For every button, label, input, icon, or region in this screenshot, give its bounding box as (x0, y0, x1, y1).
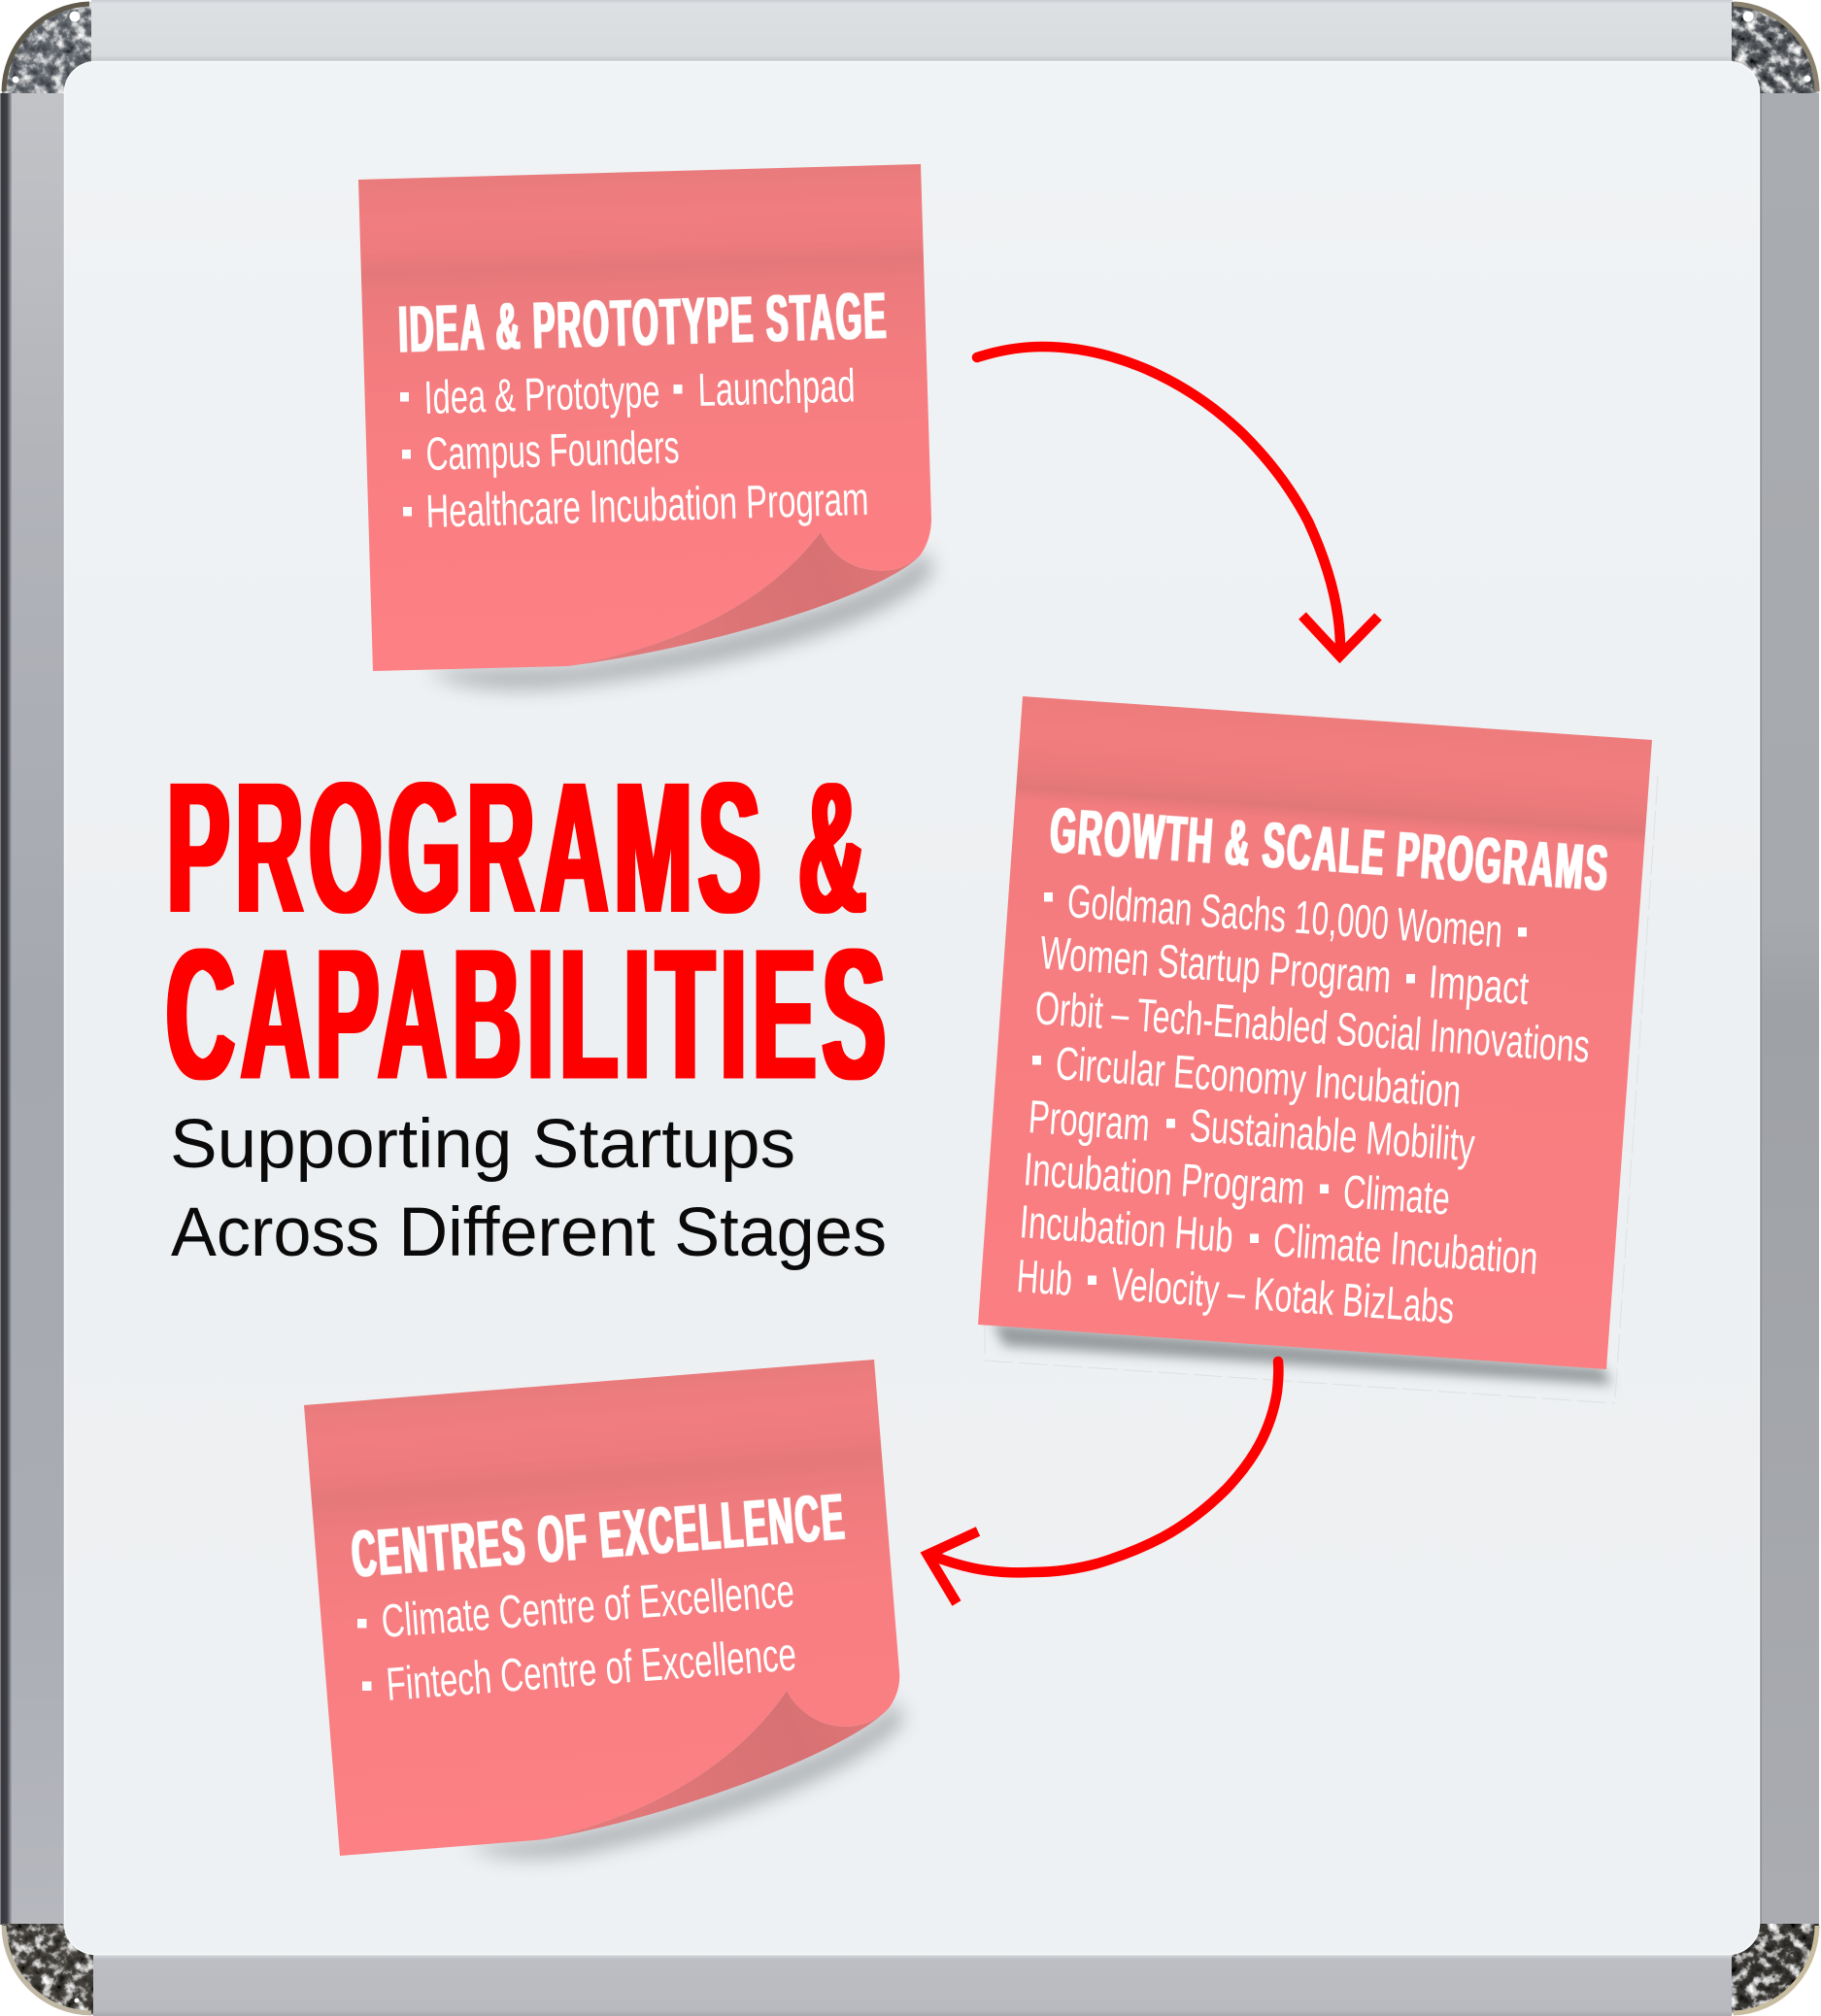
note list: Idea & Prototype (423, 366, 660, 424)
note sheet (358, 164, 931, 671)
frame bar: top (91, 0, 1733, 61)
subtitle: Supporting Startups (170, 1106, 795, 1183)
frame bar: right inner edge (1759, 93, 1762, 1925)
note list: Climate Incubation (1271, 1215, 1539, 1285)
note curled corner (568, 532, 921, 666)
note list: Climate Centre of Excellence (380, 1565, 796, 1648)
arrow: growth to centres (927, 1361, 1278, 1603)
frame bar: bottom (93, 1955, 1732, 2016)
note heading: CENTRES OF EXCELLENCE (349, 1480, 849, 1592)
note list: Climate (1341, 1166, 1452, 1226)
frame corner: bottom right (1732, 1924, 1819, 2015)
title: PROGRAMS & (167, 743, 872, 952)
note list: Velocity – Kotak BizLabs (1109, 1259, 1456, 1334)
title (166, 743, 892, 1119)
note list: Fintech Centre of Excellence (385, 1629, 798, 1711)
note list: Goldman Sachs 10,000 Women (1065, 876, 1504, 958)
title: CAPABILITIES (166, 909, 892, 1119)
arrow: idea to growth (977, 347, 1378, 656)
frame bar: left (0, 93, 65, 1925)
frame corner: top left (2, 2, 91, 93)
note list: Impact (1427, 957, 1531, 1015)
note list: Launchpad (697, 360, 856, 417)
note shadow (427, 550, 932, 689)
frame corner: top right (1732, 2, 1819, 93)
panel: idea and prototype stage note (358, 164, 932, 689)
note outline guide (985, 776, 1658, 1403)
panel: growth and scale programs note (978, 696, 1658, 1403)
note list: Sustainable Mobility (1188, 1100, 1476, 1171)
note heading: IDEA & PROTOTYPE STAGE (397, 279, 889, 366)
note list (400, 360, 869, 538)
note list: Hub (1015, 1251, 1074, 1306)
subtitle: Across Different Stages (171, 1194, 887, 1271)
note sheet (978, 696, 1652, 1369)
note list (1015, 876, 1592, 1334)
subtitle (170, 1106, 887, 1271)
note list: Program (1027, 1092, 1152, 1152)
note list: Circular Economy Incubation (1054, 1038, 1463, 1118)
frame corner: bottom left (2, 1924, 93, 2015)
note list: Women Startup Program (1038, 927, 1393, 1003)
note list (357, 1565, 798, 1711)
note list: Incubation Program (1022, 1144, 1306, 1215)
frame bar: right (1759, 93, 1819, 1925)
note list: Healthcare Incubation Program (425, 474, 869, 538)
note curled corner (541, 1691, 890, 1839)
frame bar: left dark edge (0, 93, 12, 1925)
note sheet (304, 1360, 899, 1856)
panel: centres of excellence note (304, 1360, 903, 1858)
note list: Incubation Hub (1018, 1196, 1234, 1262)
note shadow (993, 1323, 1612, 1385)
note list: Campus Founders (425, 421, 680, 481)
note shadow (466, 1699, 903, 1858)
